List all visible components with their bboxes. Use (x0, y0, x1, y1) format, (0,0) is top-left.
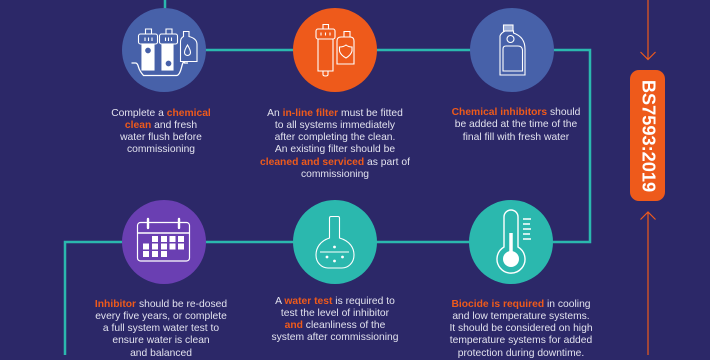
text: water test: and cleanliness of the (285, 320, 385, 331)
text: biocide: and low temperature systems. (452, 311, 590, 322)
text: in-line filter: cleaned and serviced as part of (260, 156, 410, 168)
text: water test: test the level of inhibitor (281, 308, 389, 319)
text: chemical inhibitors: Chemical inhibitors should (452, 107, 580, 118)
text: in-line filter (260, 108, 410, 180)
text: in-line filter: to all systems immediately (275, 120, 395, 131)
icon: chemical clean (122, 8, 206, 92)
text: biocide: protection during downtime. (458, 348, 584, 358)
icon: calendar (122, 200, 206, 284)
text: chemical inhibitors: be added at the time of the (455, 119, 577, 130)
text: inhibitor re-dose: ensure water is clean (112, 335, 210, 346)
text: inhibitor re-dose: Inhibitor should be re-dosed (95, 298, 227, 310)
arrow: bottom arrow into standard (640, 212, 656, 355)
text: chemical clean: commissioning (127, 144, 195, 155)
icon: flask (293, 200, 377, 284)
text: inhibitor re-dose: and balanced (130, 348, 192, 358)
icon: thermometer (469, 200, 553, 284)
text: chemical clean: water flush before (120, 132, 202, 143)
text: inhibitor re-dose: a full system water test to (103, 323, 219, 334)
text: biocide: temperature systems for added (450, 335, 592, 346)
badge: standard (630, 70, 665, 201)
text: chemical inhibitors: final fill with fresh water (463, 132, 569, 142)
text: chemical clean: clean and fresh (125, 120, 197, 131)
text: chemical clean (111, 108, 211, 155)
text: biocide (449, 298, 593, 358)
text: water test: A water test is required to (275, 296, 395, 306)
text: in-line filter: commissioning (301, 169, 369, 180)
text: chemical clean: Complete a chemical (111, 108, 211, 118)
text: water test (271, 296, 399, 343)
arrow: top arrow into standard (640, 0, 656, 60)
text: in-line filter: An in-line filter must be fitted (267, 108, 403, 118)
icon: in-line filter (293, 8, 377, 92)
text: chemical inhibitors (452, 107, 580, 142)
icon: chemical inhibitor bottle (470, 8, 554, 92)
text: biocide: Biocide is required in cooling (451, 298, 591, 310)
text: biocide: It should be considered on high (449, 323, 593, 334)
text: in-line filter: after completing the clean. (275, 132, 395, 143)
badge: standard: BS7593:2019 (638, 79, 658, 192)
connector line (65, 0, 590, 355)
text: inhibitor re-dose: every five years, or complete (95, 311, 227, 322)
text: water test: system after commissioning (271, 332, 399, 343)
text: in-line filter: An existing filter should be (275, 144, 395, 155)
text: inhibitor re-dose (95, 298, 227, 358)
